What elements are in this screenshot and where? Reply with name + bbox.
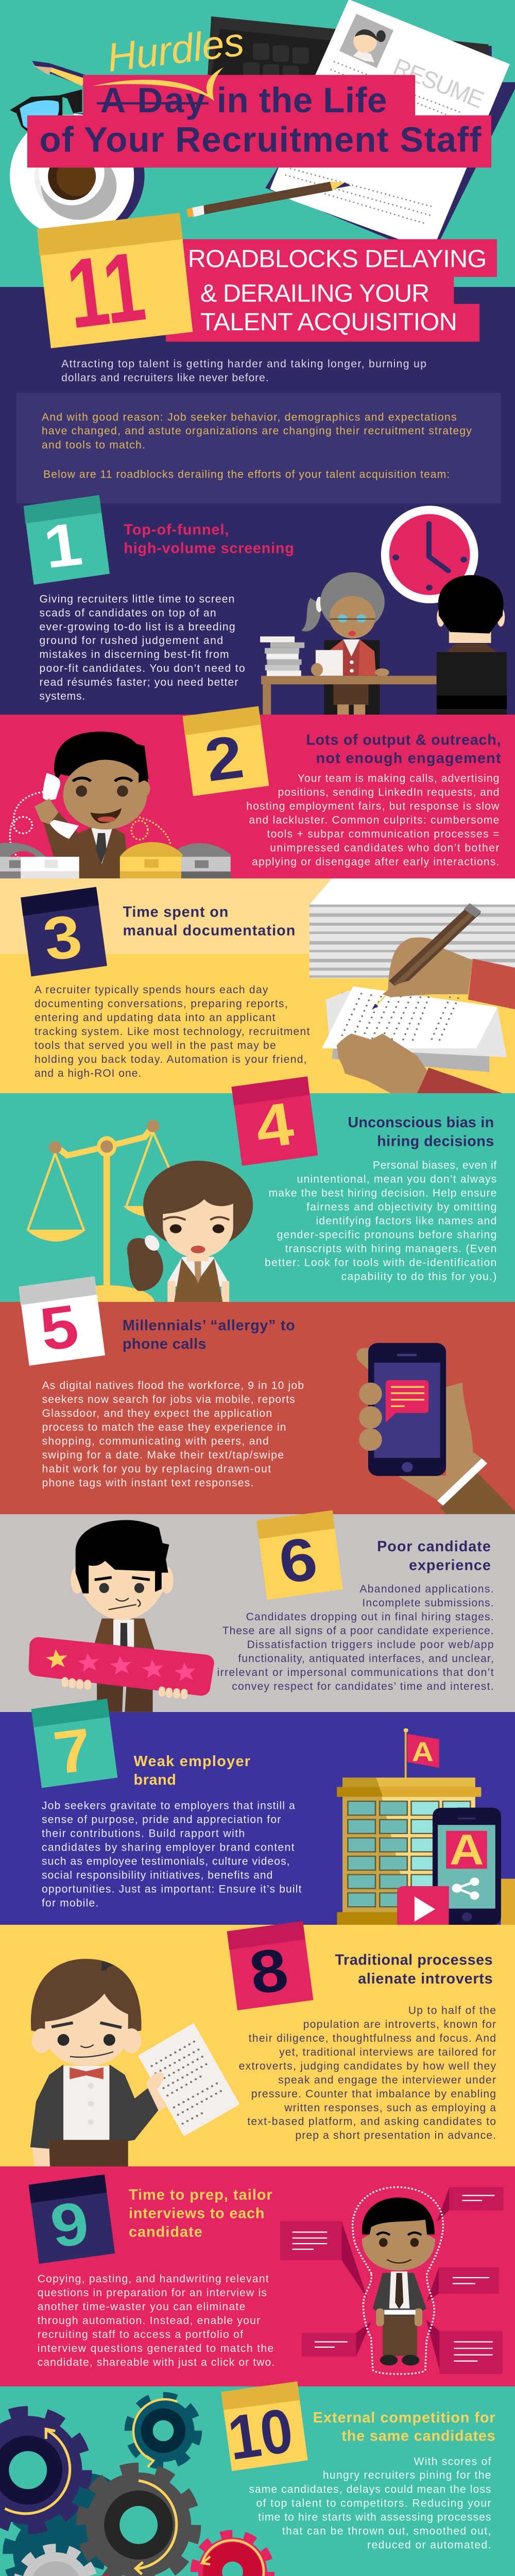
panel: roadblock 10 xyxy=(0,2381,515,2576)
intro text: Attracting top talent is getting harder and taking longer, burning up xyxy=(61,358,426,370)
heading xyxy=(348,1114,494,1149)
body text xyxy=(42,1380,304,1489)
body text: capability to do this for you.) xyxy=(341,1270,496,1282)
subtitle banner: & DERAILING YOUR xyxy=(200,279,430,307)
calendar: 2 xyxy=(183,706,269,796)
body text: identifying factors like names and xyxy=(316,1215,496,1227)
body text xyxy=(246,773,500,868)
body text: functionality, antiquated interfaces, and unclear, xyxy=(238,1653,494,1665)
body text: Up to half of the xyxy=(408,2005,496,2016)
illustration: candidate surrounded by speech boxes xyxy=(280,2187,504,2374)
body text: extroverts, judging candidates by how well they xyxy=(239,2060,496,2072)
body text: of top talent to competitors. Reducing your xyxy=(256,2497,491,2509)
heading: hiring decisions xyxy=(377,1133,494,1149)
calendar: 10: 10 xyxy=(224,2395,297,2473)
calendar: 11 xyxy=(32,2574,118,2576)
heading: manual documentation xyxy=(123,923,295,939)
body text: documenting conversations, preparing reports, xyxy=(35,998,288,1010)
panel: roadblock 8 xyxy=(0,1921,515,2166)
calendar: 7 xyxy=(31,1699,117,1788)
heading: interviews to each xyxy=(129,2206,264,2222)
heading: Weak employer xyxy=(134,1753,250,1770)
calendar: 3 xyxy=(21,887,107,976)
body text: applying or disengage after early interactions. xyxy=(252,856,499,868)
body text: tools + subpar communication processes = xyxy=(267,828,499,840)
calendar: 11 xyxy=(37,213,193,349)
heading: experience xyxy=(409,1557,491,1573)
intro text xyxy=(61,358,426,384)
heading xyxy=(123,1317,295,1352)
body text: written responses, such as employing a xyxy=(284,2102,496,2114)
heading xyxy=(129,2187,272,2241)
panel: roadblock 5 xyxy=(0,1276,515,1515)
body text: habit work for you by replacing drawn-out xyxy=(42,1463,271,1475)
body text: mistakes in discerning best-fit from xyxy=(40,649,229,660)
panel: roadblock 6 xyxy=(0,1510,515,1712)
body text: gender-specific pronouns before sharing xyxy=(277,1229,496,1241)
body text: Personal biases, even if xyxy=(373,1159,496,1171)
heading xyxy=(335,1952,493,1987)
title banner xyxy=(27,67,491,167)
body text: interview questions generated to match the xyxy=(38,2343,273,2354)
illustration: man holding one-star rating xyxy=(38,1520,205,1712)
heading xyxy=(134,1753,250,1788)
subtitle banner: ROADBLOCKS DELAYING xyxy=(188,245,487,273)
body text: fairness and objectivity by omitting xyxy=(306,1201,496,1213)
body text: text-based platform, and asking candidates to xyxy=(247,2116,496,2128)
body text: A recruiter typically spends hours each day xyxy=(35,984,268,996)
body text: unimpressed candidates who don’t bother xyxy=(270,842,499,854)
calendar: 2: 2 xyxy=(200,723,248,794)
body text: Glassdoor, and they expect the application xyxy=(42,1408,272,1419)
body text: holding you back today. Automation is your friend, xyxy=(35,1054,307,1065)
body text: Dissatisfaction triggers include poor web/app xyxy=(247,1639,494,1651)
body text: shopping, communicating with peers, and xyxy=(42,1435,269,1447)
body text xyxy=(35,984,310,1079)
body text: and a high-ROI one. xyxy=(35,1067,141,1079)
heading: Lots of output & outreach, xyxy=(306,732,501,748)
illustration: hands documenting on paper xyxy=(310,878,515,1093)
body text: their contributions. Build rapport with xyxy=(42,1828,245,1840)
text: resume word: RESUME xyxy=(389,53,488,113)
calendar: 9 xyxy=(28,2175,115,2264)
calendar: 4: 4 xyxy=(251,1090,298,1161)
illustration: employer brand building and phone: A xyxy=(412,1737,434,1767)
body text xyxy=(249,2455,491,2551)
body text: read résumés faster; you need better xyxy=(40,676,238,688)
body text: As digital natives flood the workforce, 9 in 10 job xyxy=(42,1380,304,1392)
calendar: 5 xyxy=(19,1276,105,1366)
body text: unintentional, mean you don’t always xyxy=(297,1173,496,1185)
body text: systems. xyxy=(40,690,85,702)
body text: Copying, pasting, and handwriting relevant xyxy=(38,2273,269,2285)
heading: Poor candidate xyxy=(377,1538,491,1555)
body text: Giving recruiters little time to screen xyxy=(40,593,234,605)
body text: speak and engage the interviewer under xyxy=(278,2074,496,2086)
calendar: 7: 7 xyxy=(49,1716,97,1787)
body text: ground for rushed judgement and xyxy=(40,635,223,647)
body text: sense of purpose, pride and appreciation for xyxy=(42,1814,281,1826)
panel: header xyxy=(0,0,515,503)
illustration: recruiter at desk with clock xyxy=(260,506,507,715)
body text: With scores of xyxy=(414,2455,491,2467)
body text xyxy=(38,2273,274,2368)
body text: hosting employment fairs, but response is slow xyxy=(246,801,500,812)
subtitle banner: TALENT ACQUISITION xyxy=(200,308,457,336)
illustration: hand holding phone xyxy=(356,1343,515,1514)
heading: hurdles: Hurdles xyxy=(105,20,246,80)
body text: population are introverts, known for xyxy=(303,2019,496,2030)
body text: These are all signs of a poor candidate experience. xyxy=(222,1625,494,1637)
calendar: 9: 9 xyxy=(46,2189,93,2261)
heading: alienate introverts xyxy=(358,1971,493,1987)
body text: and lackluster. Common culprits: cumbersome xyxy=(249,815,499,826)
callout: with good reason: And with good reason: Job seeker behavior, demographics and expectations xyxy=(42,411,456,423)
title banner: A Day xyxy=(100,80,205,120)
body text: pressure. Counter that imbalance by enabling xyxy=(251,2088,496,2100)
body text: convey respect for candidates’ time and interest. xyxy=(232,1681,494,1692)
body text: their diligence, thoughtfulness and focus. And xyxy=(249,2032,496,2044)
heading: the same candidates xyxy=(341,2428,495,2445)
panel: roadblock 1 xyxy=(0,495,515,715)
body text: irrelevant or impersonal communications that don’t xyxy=(217,1667,494,1679)
illustration: employer brand building and phone: A xyxy=(450,1825,484,1873)
calendar: 1: 1 xyxy=(40,511,86,581)
body text: recruiting staff to access a portfolio of xyxy=(38,2329,243,2341)
body text: tracking system. Like most technology, recruitment xyxy=(35,1026,310,1038)
illustration: gears xyxy=(0,2396,270,2576)
body text: transcripts with hiring managers. (Even xyxy=(285,1243,496,1255)
calendar: 11: 11 xyxy=(61,231,150,349)
body text: ever-growing to-do list is a breeding xyxy=(40,621,235,633)
body text: scads of candidates on top of an xyxy=(40,607,216,619)
title banner: in the Life xyxy=(217,80,387,120)
body text: candidate, shareable with just a click or two. xyxy=(38,2357,274,2368)
body text: positions, sending LinkedIn requests, and xyxy=(278,787,499,799)
body text: Abandoned applications. xyxy=(359,1583,494,1595)
body text: make the best hiring decision. Help ensure xyxy=(269,1187,496,1199)
heading: Traditional processes xyxy=(335,1952,493,1969)
heading xyxy=(123,904,295,939)
heading xyxy=(306,732,501,767)
panel: roadblock 3 xyxy=(0,878,515,1093)
body text xyxy=(40,593,245,702)
body text: through automation. Instead, enable your xyxy=(38,2315,260,2327)
body text: that can be thrown out, smoothed out, xyxy=(282,2526,491,2537)
body text: Job seekers gravitate to employers that instill a xyxy=(42,1800,295,1812)
callout: with good reason: have changed, and astute organizations are changing their recruitment strategy xyxy=(42,425,472,437)
body text xyxy=(239,2005,496,2142)
body text: candidates by sharing employer brand content xyxy=(42,1842,295,1854)
heading xyxy=(124,521,294,556)
body text: phone tags with instant text responses. xyxy=(42,1477,253,1489)
body text: prep a short presentation in advance. xyxy=(295,2130,496,2142)
panel: roadblock 2 xyxy=(0,706,515,879)
body text: entering and updating data into an applicant xyxy=(35,1012,276,1024)
heading: External competition for xyxy=(313,2410,495,2426)
calendar: 1 xyxy=(24,495,110,585)
panel: roadblock 11 xyxy=(0,2574,515,2576)
body text: poor-fit candidates. You don’t need to xyxy=(40,663,245,674)
body text: questions in preparation for an interview is xyxy=(38,2287,267,2299)
body text: opportunities. Just as important: Ensure it’s built xyxy=(42,1884,302,1895)
body text: for mobile. xyxy=(42,1897,98,1909)
body text: reduced or automated. xyxy=(367,2539,491,2551)
body text xyxy=(265,1159,496,1282)
heading xyxy=(377,1538,491,1573)
calendar: 5: 5 xyxy=(36,1292,83,1364)
body text xyxy=(217,1583,494,1692)
calendar: 6: 6 xyxy=(274,1525,322,1596)
calendar: 8 xyxy=(227,1921,313,2010)
heading: phone calls xyxy=(123,1336,207,1352)
heading: Unconscious bias in xyxy=(348,1114,494,1131)
heading: high-volume screening xyxy=(124,540,294,556)
title banner: of Your Recruitment Staff xyxy=(40,120,482,160)
heading: brand xyxy=(134,1772,176,1788)
calendar: 6 xyxy=(256,1510,343,1600)
calendar: 8: 8 xyxy=(245,1936,293,2007)
body text xyxy=(42,1800,302,1909)
body text: time to hire starts with assessing processes xyxy=(258,2512,491,2523)
heading xyxy=(313,2410,495,2445)
body text: process to match the ease they experience in xyxy=(42,1421,286,1433)
illustration: man holding document xyxy=(30,1959,240,2166)
callout: with good reason: and tools to match. xyxy=(42,439,145,451)
callout: with good reason: Below are 11 roadblocks derailing the efforts of your talent acquisition team: xyxy=(43,468,450,480)
heading: Top-of-funnel, xyxy=(124,521,229,538)
panel: roadblock 4 xyxy=(0,1076,515,1319)
body text: Incomplete submissions. xyxy=(362,1597,494,1609)
intro text: dollars and recruiters like never before. xyxy=(61,372,269,384)
illustration: scales and woman xyxy=(26,1120,253,1319)
heading: candidate xyxy=(129,2224,202,2241)
heading: Millennials’ “allergy” to xyxy=(123,1317,295,1334)
body text: same candidates, delays could mean the loss xyxy=(249,2484,491,2496)
body text: Candidates dropping out in final hiring stages. xyxy=(246,1611,494,1623)
heading: Time spent on xyxy=(123,904,228,920)
calendar: 4 xyxy=(232,1076,318,1166)
panel: roadblock 9 xyxy=(0,2166,515,2386)
calendar: 3: 3 xyxy=(39,902,86,974)
callout: with good reason xyxy=(16,393,501,503)
body text: swiping for a date. Make their text/tap/swipe xyxy=(42,1449,284,1461)
body text: tools that served you well in the past may be xyxy=(35,1040,276,1052)
body text: another time-waster you can eliminate xyxy=(38,2301,245,2313)
body text: social responsibility initiatives, benefits and xyxy=(42,1870,272,1882)
body text: yet, traditional interviews are tailored for xyxy=(279,2046,496,2058)
illustration: desk with keyboard, resume, coffee, glasses and pens xyxy=(10,0,515,240)
body text: better: Look for tools with de-identification xyxy=(265,1257,496,1268)
body text: hungry recruiters pining for the xyxy=(323,2469,491,2481)
body text: seekers now search for jobs via mobile, reports xyxy=(42,1394,295,1405)
panel: roadblock 7 xyxy=(0,1699,515,1925)
subtitle banner xyxy=(166,239,497,342)
body text: Your team is making calls, advertising xyxy=(298,773,499,785)
illustration: employer brand building and phone xyxy=(337,1728,515,1925)
body text: such as employee testimonials, culture videos, xyxy=(42,1856,290,1868)
heading: not enough engagement xyxy=(316,750,501,767)
illustration: man on the phone xyxy=(0,732,232,878)
heading: Time to prep, tailor xyxy=(129,2187,272,2203)
